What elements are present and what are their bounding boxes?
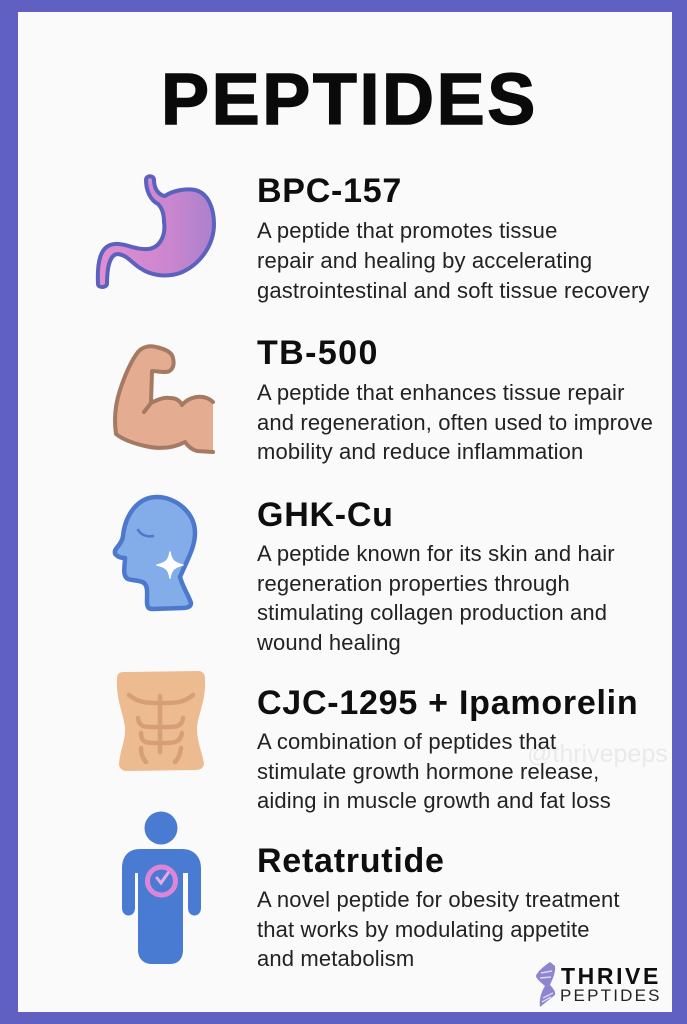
text: GHK-Cu description: wound healing (257, 630, 401, 654)
text: CJC-1295 description (257, 729, 611, 813)
text: BPC-157 description: gastrointestinal and soft tissue recovery (257, 278, 650, 303)
text: BPC-157 description: repair and healing by accelerating (257, 248, 592, 273)
title: PEPTIDES (161, 60, 538, 140)
text: CJC-1295 description: aiding in muscle growth and fat loss (257, 788, 611, 813)
text: TB-500 description (257, 380, 653, 464)
heading: Retatrutide: Retatrutide (257, 842, 445, 880)
heading: GHK-Cu: GHK-Cu (257, 496, 394, 534)
text: CJC-1295 description: stimulate growth hormone release, (257, 758, 599, 784)
text: CJC-1295 description: A combination of peptides that (257, 729, 556, 754)
text: Retatrutide description: and metabolism (257, 946, 414, 971)
text: GHK-Cu description: stimulating collagen production and (257, 600, 607, 625)
icon: DNA helix (536, 962, 556, 1007)
heading: BPC-157: BPC-157 (257, 172, 402, 210)
text: BPC-157 description (257, 218, 650, 303)
text: Retatrutide description: A novel peptide for obesity treatment (257, 887, 620, 912)
text: GHK-Cu description: regeneration properties through (257, 570, 570, 596)
text: BPC-157 description: A peptide that promotes tissue (257, 218, 557, 243)
text: TB-500 description: mobility and reduce inflammation (257, 439, 583, 464)
text: GHK-Cu description: A peptide known for its skin and hair (257, 541, 615, 566)
text: GHK-Cu description (257, 541, 615, 654)
text: Retatrutide description: that works by modulating appetite (257, 916, 590, 942)
heading: CJC-1295 + Ipamorelin: CJC-1295 + Ipamorelin (257, 684, 638, 722)
heading: TB-500: TB-500 (257, 334, 379, 372)
logo subtitle: PEPTIDES (560, 986, 662, 1005)
logo wordmark: THRIVE (561, 963, 661, 989)
text: TB-500 description: A peptide that enhances tissue repair (257, 380, 625, 405)
text: Retatrutide description (257, 887, 620, 971)
logo: Thrive Peptides (536, 962, 662, 1007)
text: TB-500 description: and regeneration, often used to improve (257, 410, 653, 434)
